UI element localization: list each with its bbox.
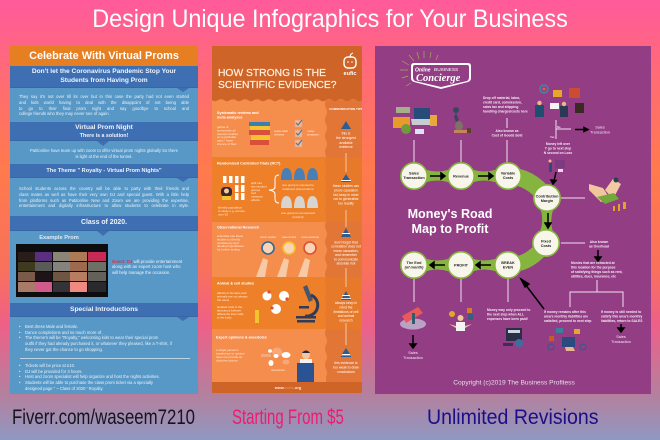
row headings (216, 111, 281, 340)
row body texts: animals are not always (217, 294, 248, 298)
tip texts: the strongest (336, 136, 356, 140)
row body texts: effects in humans and (217, 291, 247, 295)
text: theme: entertainment and digitally infrastructure to allow students to celebrate in style. (19, 203, 189, 208)
row backgrounds (212, 46, 362, 393)
bullets: tickets: DJ will be provided for 3 hours. (25, 369, 82, 374)
panel heading: Celebrate With Virtual Proms (29, 50, 179, 62)
tip texts: evidence (339, 145, 353, 149)
guest dj text: will help manage the occasion. (112, 270, 171, 275)
arrows (410, 128, 624, 348)
connectors (414, 118, 623, 307)
section heading: special introductions (10, 303, 198, 317)
row body texts: differently than cells (217, 312, 244, 316)
section heading: virtual prom night (10, 122, 198, 141)
tip texts: available (339, 141, 353, 145)
section heading: virtual prom night: There is a solution! (80, 133, 128, 139)
row body texts: meta- (307, 129, 315, 133)
bullets: tickets: • (19, 380, 20, 385)
text: if money needed (601, 310, 643, 323)
circle labels: The End (407, 261, 422, 265)
text: overhead: as Overhead (589, 244, 609, 248)
bullets: activities: • (19, 324, 20, 329)
section heading: special introductions: Special Introductions (70, 306, 138, 313)
text: money left over: Y go to next step (545, 146, 571, 150)
text: if money needed: satisfy this area's monthly (601, 314, 642, 318)
text: if money remains: area's monthly liabilities are (544, 314, 588, 318)
tip texts: this is (342, 132, 351, 136)
tip texts: research (339, 319, 353, 323)
heading: Map to Profit (412, 222, 489, 236)
tip connectors (345, 153, 347, 345)
row headings: Randomised Controlled Trials (RCT) (217, 162, 281, 166)
row body texts: develop hypotheses (217, 244, 244, 248)
section heading: pandemic: Don't let the Coronavirus Pandemic Stop Your (32, 68, 176, 75)
sales transaction labels: Sales (616, 335, 626, 339)
icon: eufic logo: eufic (343, 71, 357, 77)
row body texts: and (251, 191, 256, 195)
bullets: activities: outfit if they had already purchased it, or whatever they pleased, like a T-shirt, if (25, 341, 172, 346)
text: pandemic: college friends who they may never see of again. (19, 111, 110, 116)
text: if money needed: liabilities, return to SALES (601, 319, 643, 323)
tip texts: and remember (335, 253, 358, 257)
text: theme: from platforms such as Patitonline New and Zoom we are providing the expertise, (19, 198, 189, 203)
text: money left over: N second on Loss (544, 151, 572, 155)
text: pandemic (10, 88, 198, 122)
icon: eufic logo (343, 53, 357, 77)
row body texts: consistency and (217, 241, 239, 245)
text: money may only: the next step when ALL (487, 312, 524, 316)
text: cost of goods: Cost of Goods Sold (492, 134, 522, 138)
icon: books (249, 122, 270, 145)
tip texts: but keep in mind (334, 193, 359, 197)
bullets: tickets: • (19, 374, 20, 379)
text: drop-off: sales tax and shipping (483, 105, 518, 109)
circle labels: EVEN (503, 266, 513, 270)
icon: business people (535, 85, 584, 117)
tip texts (331, 132, 361, 374)
row body texts: scientists use these (217, 234, 244, 238)
bullets: activities: they never got the chance to go shopping. (25, 347, 103, 352)
caption: revisions: Unlimited Revisions (427, 406, 598, 429)
row body texts: one group is not exposed (281, 211, 315, 215)
sales transaction labels: Sales (408, 351, 418, 355)
row body texts: the same (217, 298, 230, 302)
text: cost of goods (492, 129, 522, 138)
row body texts: groups (251, 188, 261, 192)
row body texts: gather & (217, 125, 228, 129)
circle labels: BREAK (501, 261, 515, 265)
logo: Concierge (416, 73, 461, 84)
text: if money needed: If money is still needed to (601, 310, 641, 314)
tips heading: COMMUNICATION TIPS (329, 107, 362, 111)
panel: scientific evidence (212, 46, 362, 393)
photo grid: video call (16, 244, 108, 297)
text: solution (10, 141, 198, 164)
icon: test tube (255, 310, 259, 323)
bullets: tickets: Host and zoom specialist will help organize and host the nights activities. (25, 374, 160, 379)
icon: business analytics (548, 328, 586, 351)
row body texts: on a particular (217, 135, 236, 139)
text: money may only: Money may only proceed to (487, 308, 530, 312)
annotation texts (483, 96, 643, 323)
bullet lists (10, 317, 198, 394)
panel: virtual proms (10, 46, 198, 394)
evidence footer: www.eufic.org (274, 385, 302, 390)
text: if money remains: If money remains after this (544, 310, 586, 314)
icon: lab mice (262, 290, 289, 314)
tip texts: prove causation (334, 188, 358, 192)
text: monies (571, 261, 623, 278)
bullets: activities: • (19, 330, 20, 335)
section heading: class of 2020 (10, 216, 198, 231)
circle labels: Contribution (536, 194, 559, 198)
icon: person and chart (548, 160, 565, 172)
copyright: Copyright (c)2019 The Business Profitess (453, 380, 575, 386)
row body texts: systematic (274, 129, 289, 133)
row body texts: two random (251, 184, 267, 188)
example prom block (10, 231, 198, 303)
tip texts: too readily (338, 202, 354, 206)
tip texts: these studies can (333, 184, 359, 188)
row body texts: reviews (274, 132, 285, 136)
guest dj text: Guest: DJ will provide entertainment (112, 259, 182, 264)
tip texts: absolute risk (336, 262, 356, 266)
guest dj text (112, 259, 182, 275)
icon: brace (269, 175, 279, 203)
circle labels: Variable (501, 172, 515, 176)
caption: price: Starting From $5 (232, 406, 344, 429)
text: if money remains (544, 310, 591, 323)
text: monies: this location for the purpose (571, 266, 616, 270)
tip texts: always keep in (335, 301, 357, 305)
text: theme: class mates as well as have their very own DJ and special guest. With a little help (19, 192, 189, 197)
text: overhead (589, 240, 609, 248)
icon: blue group (281, 168, 318, 180)
tip texts: too weak to draw (333, 366, 359, 370)
circle labels: Costs (541, 244, 551, 248)
tip texts: mind the (339, 305, 353, 309)
evidence heading: HOW STRONG IS THE (218, 68, 326, 79)
notches (97, 88, 189, 321)
tip texts: limitations of cell (334, 310, 359, 314)
text: monies: of satisfying things such as rent, (571, 270, 623, 274)
text: money may only (487, 308, 530, 321)
sales transaction labels: Transaction (590, 130, 610, 134)
row headings: Systematic reviews and (217, 111, 259, 115)
evidence header (212, 46, 362, 101)
icon: evidence pyramids (341, 121, 351, 357)
panel: money road map (375, 46, 651, 394)
icon: microscope (296, 285, 318, 322)
row headings: Observational Research (217, 226, 260, 230)
text: monies: Monies that are extracted at (571, 261, 616, 265)
bullets: activities: The theme's will be "Royalty," welcoming kids to wear their special prom (25, 335, 158, 340)
circle labels: PROFIT (454, 264, 469, 268)
row body texts: relevant studies (217, 132, 239, 136)
circle labels: Revenue (453, 174, 469, 178)
row headings: Expert opinions & anecdotes (216, 336, 267, 340)
row body texts: laboratory behave (217, 308, 241, 312)
text: money may only: expenses have been paid! (487, 317, 528, 321)
bullets: tickets (19, 363, 160, 391)
row body texts: to study e.g. women (218, 209, 245, 213)
text: pandemic: and kids world having to deal with the disappoint of not being able (19, 100, 189, 105)
text: monies: utilities, dues, insurance, etc (571, 274, 616, 278)
icon: magnifiers (256, 242, 316, 277)
text: pandemic: to go to their final prom night and say goodbye to school and (19, 106, 189, 111)
text: theme (10, 178, 198, 216)
guest dj text: along with an expert zoom host who (112, 264, 181, 269)
circle labels: Transaction (403, 176, 425, 180)
tip texts: this evidence is (334, 361, 358, 365)
row body texts: split into (251, 181, 262, 185)
text: solution: Patitonline have team up with zoom to offer virtual prom nights globally So there (30, 148, 178, 153)
sales transaction labels: Transaction (611, 340, 631, 344)
sales transaction labels: Transaction (403, 356, 423, 360)
text: yes no: Yes (550, 135, 555, 139)
row headings: meta-analyses (217, 116, 242, 120)
tip texts: don't forget that (334, 240, 358, 244)
heading: Money's Road (408, 207, 492, 221)
text: solution: is light at the end of the tunnel. (75, 154, 133, 159)
evidence heading: SCIENTIFIC EVIDENCE? (218, 80, 337, 91)
bullets: tickets: designed page " ~ Class of 2020 ' Royalty. (25, 386, 103, 391)
row body texts: isolated cells in the (217, 305, 243, 309)
row body texts: studies to identify (217, 237, 241, 241)
row body texts: over 65 (218, 212, 228, 216)
circle labels: Fixed (541, 240, 552, 244)
row body texts: chance of bias (217, 142, 237, 146)
road path (414, 164, 559, 277)
sales transaction labels (403, 126, 631, 360)
icon: checkboxes (295, 120, 302, 147)
row body texts: a single person's (216, 348, 239, 352)
circle labels (403, 172, 559, 270)
row body texts: measure (251, 195, 263, 199)
row body texts: cross-sectional (301, 235, 319, 239)
text: drop-off: credit card, commission, (483, 100, 522, 104)
row body texts: anecdotes (271, 368, 285, 372)
text: overhead: Also known (590, 240, 608, 244)
row body texts: in the body (217, 316, 232, 320)
section heading: pandemic: Students from Having Prom (60, 77, 148, 84)
bullets: tickets: • (19, 369, 20, 374)
text: money left over (544, 142, 572, 155)
row body texts: for further testing (217, 248, 240, 252)
row body texts: does not provide an (216, 355, 243, 359)
bullets: activities (19, 324, 172, 352)
row body texts: objective picture (216, 358, 238, 362)
row body texts: one group is exposed to (282, 183, 314, 187)
row body texts: experience or opinion (216, 352, 245, 356)
text: pandemic: They say it's not over till its over but in this case the party had not even started (19, 94, 189, 99)
bullets: tickets: • (19, 363, 20, 368)
row body texts: case-control (282, 235, 296, 239)
tip texts: conclusions (337, 370, 355, 374)
text: cost of goods: Also known as (495, 129, 519, 133)
row body texts: (control) (292, 215, 304, 219)
icon: calendar (400, 307, 426, 330)
text: drop-off: handling charges/costs here (483, 110, 528, 114)
circle labels: (of month) (405, 266, 424, 270)
row body texts: cohort studies (260, 235, 277, 239)
tip texts: mean causation, (334, 249, 358, 253)
icon: money and laptop (393, 107, 437, 134)
tip texts: to communicate (334, 257, 358, 261)
section heading: class of 2020: Class of 2020. (81, 219, 127, 226)
icon: calculator and money (503, 328, 523, 347)
icon: money bag and hand (453, 107, 471, 133)
example prom label: Example Prom (39, 235, 79, 241)
caption: fiverr: Fiverr.com/waseem7210 (12, 406, 195, 429)
row body texts: analyses (307, 132, 319, 136)
section heading: virtual prom night: Virtual Prom Night (75, 124, 133, 131)
logo: BUSINESS (434, 67, 458, 73)
icon: speech bubbles (261, 348, 290, 366)
row body texts: summarise all (217, 128, 236, 132)
bullets: activities: Best dress Male and female. (25, 324, 78, 329)
section heading: pandemic (10, 66, 198, 88)
bullets: tickets: Students will be able to purchase the class prom ticket via a specially (25, 380, 153, 385)
text: if money remains: satisfied, proceed to next step (544, 319, 591, 323)
text: yes no: No (557, 125, 561, 129)
tip texts: correlation does not (331, 245, 361, 249)
row body texts: treatment (intervention) (282, 187, 314, 191)
circle labels: Margin (541, 199, 554, 203)
row headings: Animal & cell studies (217, 282, 254, 286)
icon: grey group (281, 196, 318, 208)
row body texts: identify population (218, 206, 243, 210)
row body texts: effects (251, 198, 260, 202)
row body texts: topic * lower (217, 139, 233, 143)
logo: Online (415, 68, 431, 74)
section heading: theme (10, 164, 198, 178)
row body texts (216, 125, 319, 372)
circles (401, 163, 560, 278)
bullets: activities: Dance completions and so much more of . (25, 330, 103, 335)
bullets: activities: • (19, 335, 20, 340)
circle labels: Costs (503, 176, 513, 180)
text: drop-off (483, 96, 528, 114)
section heading: theme: The Theme " Royalty - Virtual Prom Nights" (46, 168, 162, 174)
text: drop-off: Drop off material, labor, (483, 96, 520, 100)
icon: people group (221, 176, 244, 200)
panel heading (10, 46, 198, 66)
icon: presenter and charts (449, 308, 473, 331)
title: Design Unique Infographics for Your Business (92, 5, 568, 33)
heading (408, 207, 492, 236)
tip texts: and animal (338, 314, 355, 318)
logo (400, 51, 471, 89)
circle labels: Sales (409, 172, 419, 176)
evidence footer (212, 382, 362, 393)
text: money left over: Money left over (546, 142, 571, 146)
text: yes no (550, 125, 561, 139)
text: theme: School students across the country will be able to party with their friends and (19, 186, 189, 191)
icon: speaker at podium (297, 350, 314, 382)
sales transaction labels: Sales (595, 126, 605, 130)
icon: hands and coins (589, 178, 626, 211)
bullets: tickets: Tickets will be price at £10. (25, 363, 75, 368)
tip texts: not to generalise (333, 197, 359, 201)
